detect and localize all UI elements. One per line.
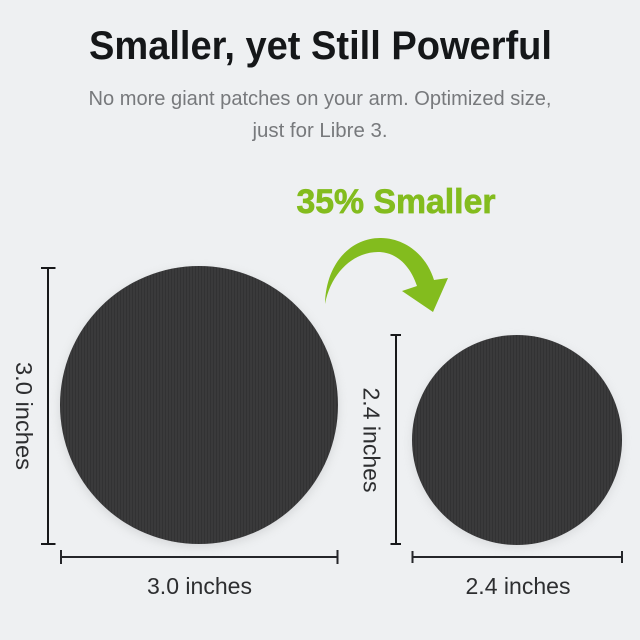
arrow: curved green arrow [325, 238, 448, 312]
title: Smaller, yet Still Powerful [89, 24, 552, 68]
subtitle [88, 88, 552, 142]
small patch height label: 2.4 inches [358, 388, 384, 492]
large patch circle [60, 266, 338, 547]
subtitle: No more giant patches on your arm. Optimized size, [88, 88, 552, 110]
large patch height label: 3.0 inches [11, 362, 37, 470]
callout: 35% Smaller: 35% Smaller [296, 183, 496, 221]
small patch width label: 2.4 inches [466, 573, 570, 599]
large patch width label: 3.0 inches [147, 573, 252, 599]
small patch width dimension line [412, 551, 622, 563]
subtitle: just for Libre 3. [251, 120, 388, 142]
small patch height dimension line [390, 335, 401, 544]
large patch width dimension line [61, 550, 338, 564]
small patch circle [412, 335, 622, 548]
large patch height dimension line [41, 268, 56, 544]
